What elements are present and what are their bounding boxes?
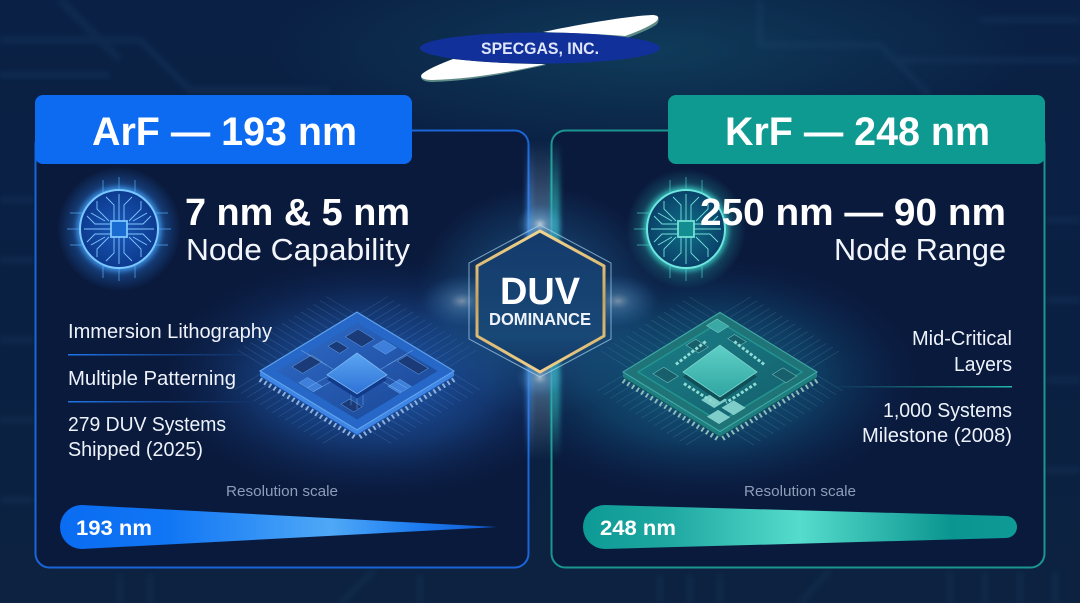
chip components [706, 319, 729, 333]
chip board [275, 322, 439, 420]
stat: node capability [185, 192, 410, 267]
feature list: Shipped (2025) [68, 439, 203, 461]
center die [327, 358, 387, 399]
stat: node range: 250 nm — 90 nm [700, 192, 1006, 234]
stat: node range [700, 192, 1006, 267]
header tab: KrF — 248 nm [725, 110, 990, 154]
chip components [345, 329, 374, 347]
header tab [668, 95, 1045, 164]
chip board [638, 322, 802, 422]
panel body [36, 130, 528, 568]
panel body [552, 130, 1044, 568]
logo: Specgas, Inc. [420, 15, 660, 82]
feature list: Immersion Lithography [68, 321, 272, 343]
resolution scale: 248 nm: Resolution scale [744, 484, 856, 500]
header tab: ArF — 193 nm [92, 110, 357, 154]
badge text: DOMINANCE [489, 309, 591, 329]
central light beams [526, 140, 560, 460]
central badge: DUV Dominance [415, 186, 665, 416]
package base [623, 318, 817, 437]
feature list [830, 328, 1012, 447]
package base [260, 318, 454, 436]
feature list: Mid-Critical [912, 328, 1012, 350]
feature list: Multiple Patterning [68, 368, 236, 390]
feature list: 1,000 Systems [883, 400, 1012, 422]
feature list [68, 321, 272, 461]
stat: node capability: Node Capability [186, 232, 410, 267]
header tab [35, 95, 412, 164]
badge text: DUV [500, 271, 581, 313]
badge text [489, 271, 591, 329]
stat: node range: Node Range [834, 232, 1006, 267]
stat: node capability: 7 nm & 5 nm [185, 192, 410, 234]
feature list: Layers [954, 354, 1012, 376]
feature list: Milestone (2008) [862, 425, 1012, 447]
chip glow [188, 274, 528, 482]
logo swooshes [421, 15, 659, 82]
resolution scale: 248 nm: 248 nm [600, 517, 676, 540]
resolution scale: 193 nm [60, 484, 497, 549]
chip illustration: teal [594, 295, 846, 449]
icon: circuit globe [57, 167, 181, 291]
logo ellipse [420, 32, 660, 64]
chip glow [552, 278, 886, 478]
resolution scale: 193 nm: Resolution scale [226, 484, 338, 500]
badge hexagon [477, 231, 604, 372]
resolution scale: 193 nm: 193 nm [76, 517, 152, 540]
badge glow [415, 186, 665, 416]
panel: KrF 248 nm [550, 95, 1046, 568]
center die [683, 350, 757, 402]
logo wordmark: SPECGAS, INC. [481, 40, 599, 58]
feature list: 279 DUV Systems [68, 414, 226, 436]
chip illustration: blue [231, 294, 483, 448]
panel: ArF 193 nm [34, 95, 530, 568]
icon: circuit globe [626, 169, 746, 289]
resolution scale: 248 nm [583, 484, 1017, 549]
